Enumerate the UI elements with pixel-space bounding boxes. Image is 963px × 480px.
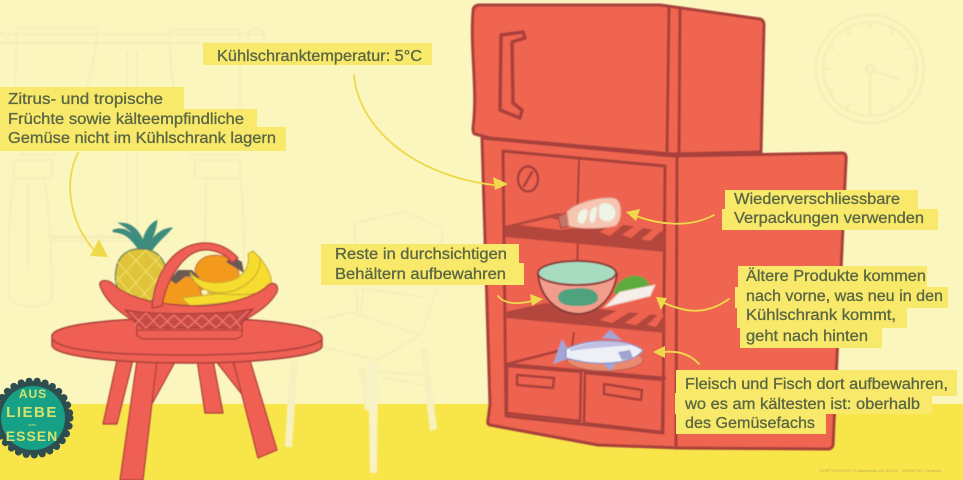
thermostat dial: [518, 166, 538, 192]
floor: [0, 404, 963, 480]
table top: [52, 318, 322, 363]
label: tropical fruit: Gemüse nicht im Kühlschrank lagern: [8, 130, 276, 147]
transparent bowl: [538, 261, 617, 314]
label: meat and fish: des Gemüsefachs: [685, 415, 815, 432]
label: meat and fish: wo es am kältesten ist: oberhalb: [684, 396, 920, 413]
fish: [553, 330, 643, 371]
food tray: [605, 276, 655, 307]
label: older products: nach vorne, was neu in den: [746, 288, 943, 305]
orange front: [160, 270, 202, 308]
background clock: [816, 15, 924, 123]
badge: Aus Liebe zum Essen: [0, 381, 70, 455]
label: packaging: Wiederverschliessbare: [734, 191, 900, 208]
orange back: [195, 255, 244, 290]
shelf two: [505, 303, 665, 333]
table with fruit basket: [52, 222, 322, 480]
pineapple: [113, 222, 170, 303]
background chair legs: [285, 347, 437, 473]
fridge: [472, 5, 846, 449]
fridge lower body: [482, 138, 846, 449]
shelf one: [505, 213, 665, 252]
badge: Aus Liebe zum Essen: ESSEN: [6, 428, 58, 444]
arrow: leftovers: [498, 294, 543, 306]
arrow: packaging: [626, 209, 714, 224]
shelf three and drawers: [507, 350, 665, 432]
label: tropical fruit: [0, 87, 286, 151]
label: meat and fish: Fleisch und Fisch dort aufbewahren,: [685, 376, 948, 393]
fridge interior frame: [503, 151, 665, 433]
label: tropical fruit: Früchte sowie kälteempfindliche: [8, 111, 244, 128]
label: temperature: Kühlschranktemperatur: 5°C: [217, 48, 422, 65]
label: temperature: [203, 43, 432, 65]
food package: [558, 198, 621, 228]
label: older products: geht nach hinten: [746, 328, 868, 345]
label: packaging: [722, 190, 938, 230]
basket: [100, 243, 277, 339]
badge: Aus Liebe zum Essen: LIEBE: [6, 404, 58, 421]
fridge upper door and side: [472, 5, 764, 154]
label: older products: Ältere Produkte kommen: [746, 267, 926, 285]
credit line: COPYRIGHT: Krautsalat.ch 2015 · GRAFIK: Grafuk: [819, 468, 941, 473]
label: older products: [735, 266, 948, 348]
label: leftovers: Behältern aufbewahren: [335, 266, 506, 283]
arrow: older products: [656, 297, 729, 311]
label: leftovers: Reste in durchsichtigen: [335, 246, 507, 263]
arrow: fish: [653, 346, 699, 364]
arrow: tropical fruit: [70, 153, 108, 257]
background chair: [313, 212, 443, 385]
fridge handle: [500, 32, 525, 118]
label: older products: Kühlschrank kommt,: [746, 307, 896, 324]
arrow: temperature: [354, 75, 508, 190]
label: tropical fruit: Zitrus- und tropische: [8, 91, 163, 108]
table legs: [103, 360, 277, 480]
background window and curtains: [0, 28, 264, 306]
label: packaging: Verpackungen verwenden: [734, 210, 924, 227]
badge: Aus Liebe zum Essen: zum: [28, 422, 36, 427]
label: meat and fish: [675, 370, 957, 434]
label: leftovers: [321, 244, 524, 285]
badge: Aus Liebe zum Essen: AUS: [19, 387, 47, 401]
bananas: [182, 251, 271, 306]
